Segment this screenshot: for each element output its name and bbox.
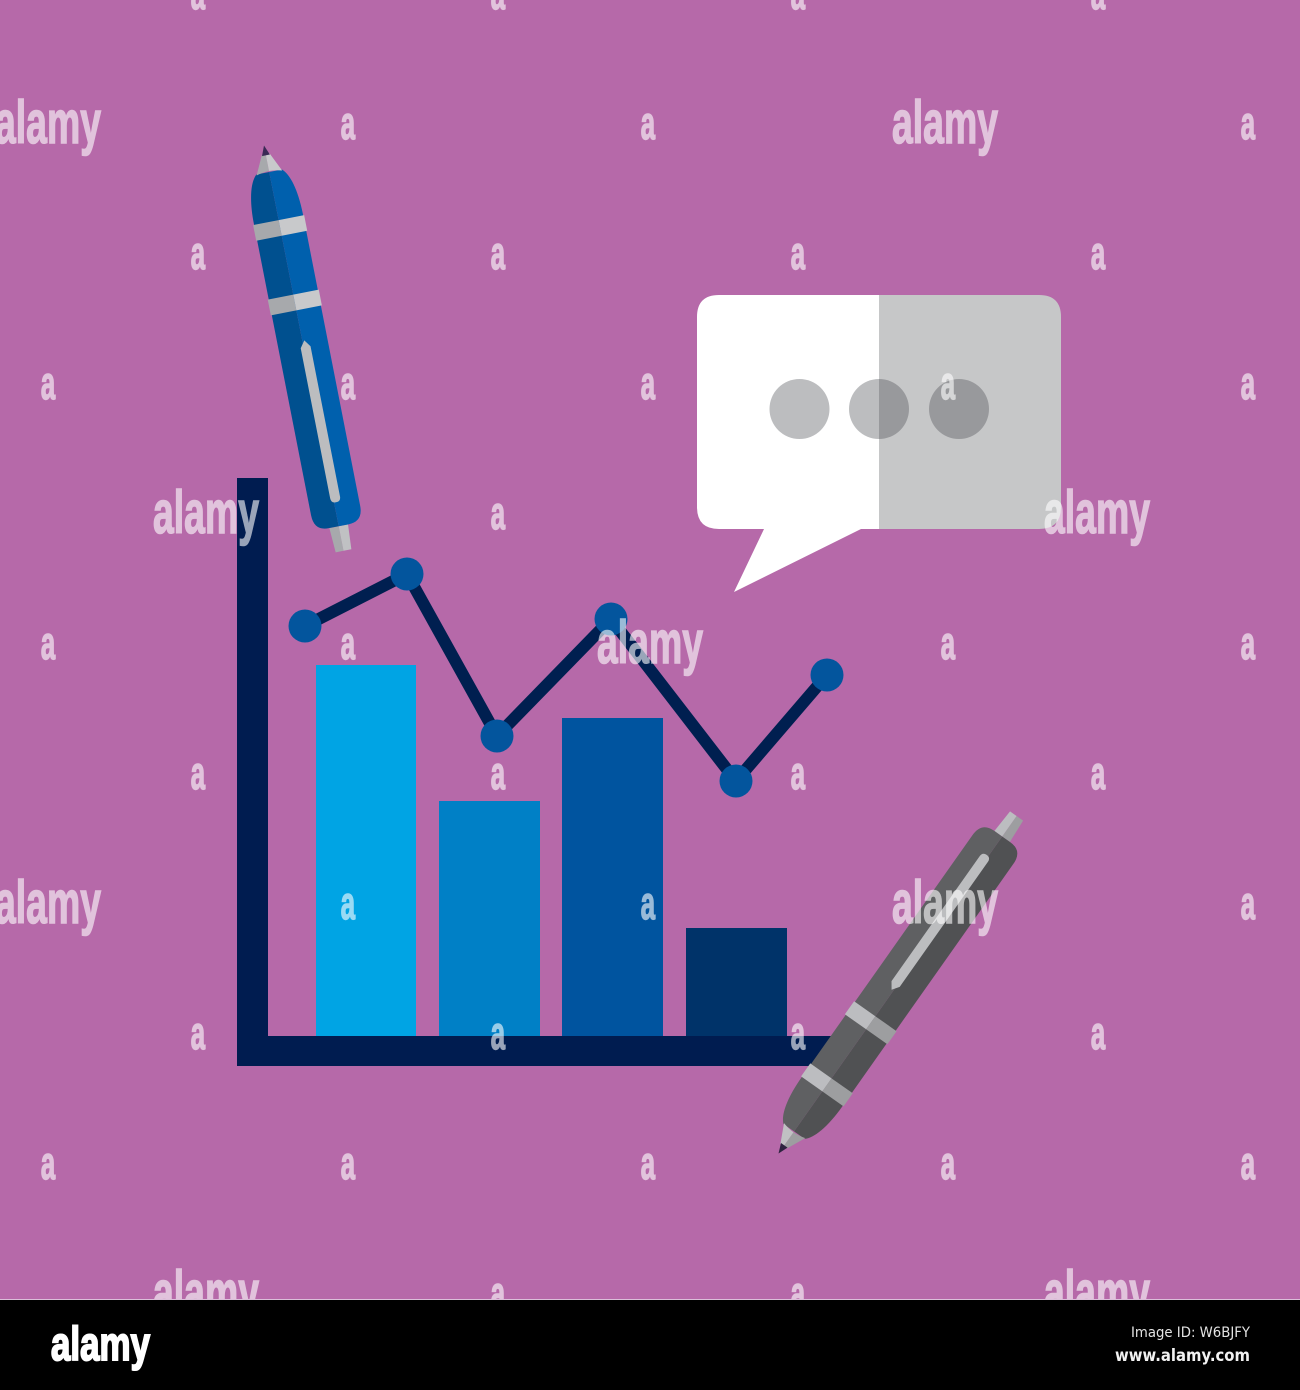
watermark words: alamy — [597, 609, 703, 676]
watermark letters: aaaa — [191, 747, 1105, 799]
watermark words: alamy — [0, 89, 101, 156]
watermark letters: aaaa — [191, 1007, 1105, 1059]
speech bubble — [697, 295, 1061, 592]
icon: blue pen — [238, 140, 369, 556]
icon: grey pen — [757, 801, 1038, 1168]
watermark words: alamy — [0, 869, 101, 936]
bubble grey half — [879, 295, 1061, 529]
watermark letters: aaaaa — [41, 1137, 1255, 1189]
watermark letters: aaa — [341, 877, 1255, 929]
footer logo: alamy — [51, 1317, 150, 1370]
chart axes — [237, 478, 840, 1066]
watermark words: alamy — [153, 1259, 259, 1326]
watermark words — [0, 89, 1150, 1326]
bar chart with line overlay — [237, 478, 844, 1066]
watermark letters: aaaa — [191, 227, 1105, 279]
footer bar — [0, 1299, 1300, 1390]
watermark letters: aa — [491, 487, 805, 539]
typing dots — [770, 379, 989, 439]
watermark words: alamy — [1044, 479, 1150, 546]
line series — [288, 558, 844, 798]
watermark words: alamy — [1044, 1259, 1150, 1326]
watermark letters: aaaaa — [41, 357, 1255, 409]
website: www.alamy.com — [1115, 1346, 1250, 1366]
watermark letters: aaa — [341, 97, 1255, 149]
watermark words: alamy — [892, 89, 998, 156]
watermark words: alamy — [153, 479, 259, 546]
watermark letters: aa — [491, 1267, 805, 1319]
watermark letters: aaaa — [41, 617, 1255, 669]
bubble white half and tail — [697, 295, 879, 592]
image id: Image ID: W6BJFY — [1131, 1325, 1250, 1341]
watermark words: alamy — [892, 869, 998, 936]
bars — [316, 665, 787, 1036]
